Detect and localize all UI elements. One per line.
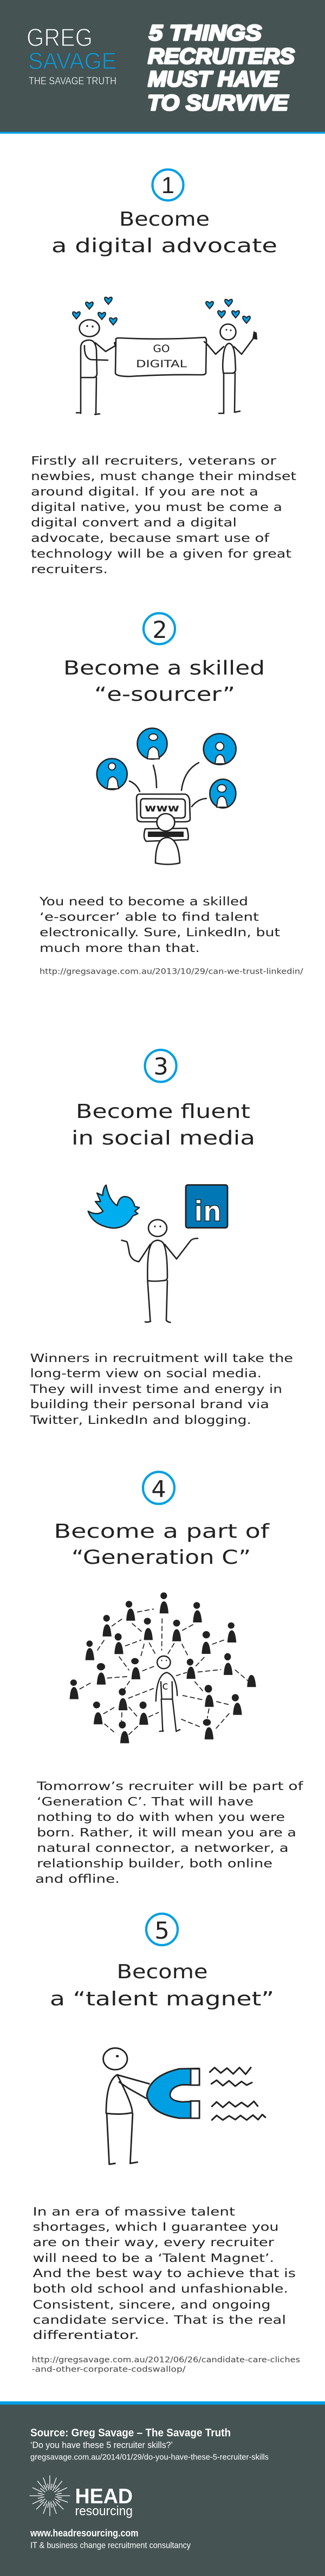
body text 4: Tomorrow’s recruiter will be part of bbox=[36, 1780, 303, 1793]
logo wordmark bbox=[75, 2485, 133, 2519]
source link 5: -and-other-corporate-codswallop/ bbox=[31, 2365, 186, 2374]
number badge 1: 1 bbox=[161, 172, 174, 199]
source credit: Source: Greg Savage – The Savage Truth bbox=[30, 2427, 231, 2439]
body text 1 bbox=[31, 454, 296, 576]
icon: linkedin bbox=[186, 1185, 227, 1228]
sign: go digital bbox=[115, 337, 206, 376]
icon: profile bubble three bbox=[204, 733, 236, 765]
right figure bbox=[204, 324, 257, 413]
left figure bbox=[76, 320, 120, 414]
central figure with C bbox=[156, 1656, 180, 1731]
number badge 3: 3 bbox=[153, 1053, 168, 1081]
body text 1: technology will be a given for great bbox=[31, 547, 291, 560]
footer bbox=[0, 2401, 325, 2576]
body text 5: shortages, which I guarantee you bbox=[32, 2221, 278, 2234]
heading 4 bbox=[54, 1520, 270, 1569]
footer contact: www.headresourcing.com bbox=[30, 2528, 138, 2539]
body text 1: Firstly all recruiters, veterans or bbox=[31, 454, 276, 467]
icon: horseshoe magnet bbox=[147, 2068, 199, 2118]
body text 1: digital convert and a digital bbox=[31, 516, 237, 529]
heading 3 bbox=[72, 1101, 255, 1149]
body text 5: will need to be a ‘Talent Magnet’. bbox=[32, 2252, 274, 2265]
title: RECRUITERS bbox=[148, 44, 295, 68]
sign: go digital: GO bbox=[153, 343, 170, 355]
body text 4: ‘Generation C’. That will have bbox=[37, 1795, 253, 1808]
header banner bbox=[0, 0, 325, 133]
source link 5: http://gregsavage.com.au/2012/06/26/candidate-care-cliches bbox=[31, 2356, 300, 2364]
heading 2: Become a skilled bbox=[63, 657, 265, 680]
logo: Greg Savage: GREG bbox=[27, 23, 93, 52]
body text 3: long-term view on social media. bbox=[30, 1367, 262, 1380]
body text 5: Consistent, sincere, and ongoing bbox=[32, 2298, 270, 2311]
figure side view bbox=[103, 2048, 150, 2164]
body text 1: digital native, you must be come a bbox=[31, 501, 282, 514]
illustration: network of people bbox=[70, 1593, 256, 1743]
logo: Greg Savage: THE SAVAGE TRUTH bbox=[29, 76, 116, 87]
body text 5: differentiator. bbox=[32, 2329, 139, 2342]
panel: 3 social media bbox=[29, 1050, 293, 1427]
heading 3: Become fluent bbox=[76, 1101, 250, 1123]
dashed network links bbox=[80, 1609, 248, 1735]
illustration: figure with magnet bbox=[103, 2048, 265, 2164]
juggling figure bbox=[121, 1219, 198, 1322]
heading 4: Become a part of bbox=[54, 1520, 270, 1543]
body text 1: advocate, because smart use of bbox=[31, 532, 270, 545]
panel: 5 talent magnet bbox=[31, 1914, 300, 2374]
body text 5: candidate service. That is the real bbox=[32, 2313, 286, 2326]
computer and user bbox=[136, 794, 190, 865]
body text 2: You need to become a skilled bbox=[39, 895, 248, 908]
body text 3: Winners in recruitment will take the bbox=[30, 1352, 293, 1365]
body text 4: born. Rather, it will mean you are a bbox=[37, 1826, 296, 1839]
number badge 5 bbox=[146, 1914, 178, 1945]
body text 5 bbox=[32, 2205, 296, 2342]
icon: profile bubble one bbox=[97, 758, 127, 790]
body text 3: Twitter, LinkedIn and blogging. bbox=[29, 1414, 251, 1427]
small people icons bbox=[70, 1593, 256, 1743]
logo: head resourcing sunburst bbox=[30, 2476, 70, 2516]
footer contact: IT & business change recruitment consultancy bbox=[30, 2541, 191, 2550]
heading 4: “Generation C” bbox=[72, 1546, 251, 1569]
panel: 1 digital advocate bbox=[31, 169, 296, 576]
number badge 4 bbox=[143, 1472, 174, 1504]
source credit: gregsavage.com.au/2014/01/29/do-you-have-these-5-recruiter-skills bbox=[30, 2453, 269, 2462]
body text 1: recruiters. bbox=[31, 562, 108, 576]
body text 5: And the best way to achieve that is bbox=[32, 2267, 296, 2280]
number badge 5: 5 bbox=[154, 1917, 170, 1945]
central figure with C: c bbox=[162, 1679, 168, 1692]
illustration: two figures holding go digital sign bbox=[73, 297, 257, 414]
source link 5 bbox=[31, 2356, 300, 2374]
body text 1: around digital. If you are not a bbox=[31, 485, 258, 498]
body text 5: both old school and unfashionable. bbox=[32, 2283, 288, 2296]
illustration: figure juggling twitter and linkedin bbox=[88, 1185, 227, 1322]
title: MUST HAVE bbox=[148, 67, 279, 91]
body text 2: ‘e-sourcer’ able to find talent bbox=[40, 911, 259, 924]
footer contact bbox=[30, 2528, 191, 2550]
body text 4: relationship builder, both online bbox=[37, 1857, 272, 1870]
body text 1: newbies, must change their mindset bbox=[31, 470, 296, 483]
icon: hearts bbox=[73, 297, 250, 325]
icon: profile bubble two bbox=[138, 728, 167, 759]
heading 5 bbox=[50, 1961, 274, 2010]
source credit bbox=[30, 2427, 269, 2462]
heading 5: a “talent magnet” bbox=[50, 1988, 274, 2010]
source credit: ‘Do you have these 5 recruiter skills?’ bbox=[30, 2440, 173, 2450]
sign: go digital: DIGITAL bbox=[136, 358, 187, 370]
number badge 4: 4 bbox=[151, 1476, 166, 1503]
number badge 1 bbox=[153, 169, 183, 201]
illustration: person at computer sourcing profiles bbox=[97, 728, 236, 865]
magnetic waves bbox=[210, 2068, 265, 2120]
logo: Greg Savage: SAVAGE bbox=[28, 48, 116, 74]
body text 3: They will invest time and energy in bbox=[29, 1383, 282, 1396]
title: 5 THINGS bbox=[149, 21, 262, 45]
body text 2 bbox=[39, 895, 280, 955]
body text 3: building their personal brand via bbox=[30, 1398, 269, 1411]
heading 3: in social media bbox=[72, 1127, 255, 1149]
icon: linkedin: in bbox=[194, 1196, 222, 1228]
body text 5: In an era of massive talent bbox=[32, 2205, 235, 2218]
body text 2: electronically. Sure, LinkedIn, but bbox=[40, 926, 280, 939]
title bbox=[147, 21, 295, 115]
heading 2 bbox=[63, 657, 265, 706]
title: TO SURVIVE bbox=[147, 91, 289, 115]
icon: twitter bird bbox=[88, 1185, 139, 1228]
logo wordmark: HEAD bbox=[75, 2485, 133, 2508]
source link 2: http://gregsavage.com.au/2013/10/29/can-we-trust-linkedin/ bbox=[40, 968, 303, 976]
logo wordmark: resourcing bbox=[75, 2504, 133, 2519]
heading 2: “e-sourcer” bbox=[94, 683, 235, 706]
heading 1: a digital advocate bbox=[51, 235, 277, 257]
number badge 2: 2 bbox=[152, 617, 167, 644]
computer and user: www bbox=[145, 802, 179, 814]
body text 4: and offline. bbox=[35, 1872, 120, 1885]
body text 5: are on their way, every recruiter bbox=[32, 2236, 274, 2249]
logo: Greg Savage bbox=[27, 23, 116, 87]
body text 2: much more than that. bbox=[40, 942, 200, 955]
number badge 3 bbox=[145, 1050, 177, 1082]
body text 4 bbox=[35, 1780, 303, 1885]
body text 4: natural connector, a networker, a bbox=[37, 1842, 289, 1855]
heading 1: Become bbox=[119, 208, 210, 231]
panel: 2 e-sourcer bbox=[39, 613, 303, 976]
body text 3 bbox=[29, 1352, 293, 1427]
number badge 2 bbox=[144, 613, 175, 644]
heading 5: Become bbox=[117, 1961, 208, 1983]
icon: profile bubble four bbox=[210, 779, 236, 808]
body text 4: nothing to do with when you were bbox=[37, 1811, 285, 1824]
connector lines bbox=[129, 763, 206, 807]
panel: 4 generation c bbox=[35, 1472, 303, 1885]
heading 1 bbox=[51, 208, 277, 257]
